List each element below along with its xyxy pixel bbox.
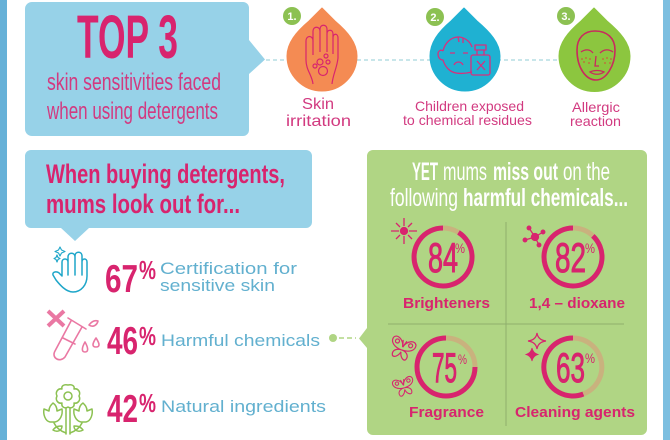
label: certification: sensitive skin bbox=[160, 276, 275, 295]
connector: chemicals to panel bbox=[329, 334, 356, 342]
connector line: top row bbox=[266, 59, 592, 61]
item 2: children exposed bbox=[403, 8, 532, 128]
label: skin irritation: Skin bbox=[302, 96, 334, 113]
chart: brighteners 84% bbox=[391, 218, 490, 312]
heading: yet mums: following bbox=[390, 184, 458, 212]
heading: when buying bbox=[46, 159, 285, 219]
item 3: allergic reaction bbox=[557, 7, 630, 129]
left border bbox=[0, 0, 7, 440]
label: allergic reaction: reaction bbox=[570, 113, 621, 129]
label: children exposed bbox=[403, 98, 532, 128]
chart: cleaning agents 63% bbox=[515, 333, 635, 421]
chart: fragrance 75% bbox=[387, 335, 484, 421]
chart: brighteners 84%: 84 bbox=[428, 234, 458, 281]
label: brighteners: Brighteners bbox=[403, 296, 490, 312]
icon: green drop with face bbox=[559, 8, 630, 92]
value: 46%: % bbox=[139, 321, 156, 351]
label: fragrance: Fragrance bbox=[409, 405, 484, 421]
subheading: when using detergents bbox=[46, 98, 218, 125]
label: children exposed: to chemical residues bbox=[403, 112, 532, 128]
heading: top 3: TOP 3 bbox=[77, 3, 178, 71]
value: 46%: 46 bbox=[107, 320, 138, 363]
heading: yet mums: miss out bbox=[493, 158, 558, 186]
value: 42%: 42 bbox=[107, 388, 138, 431]
label: certification bbox=[160, 259, 297, 295]
badge: 2: 2. bbox=[430, 12, 440, 24]
badge: 1: 1. bbox=[287, 11, 297, 23]
heading: when buying: When buying detergents, bbox=[46, 159, 285, 189]
value: 67%: % bbox=[139, 255, 156, 285]
icon: clean hand bbox=[53, 247, 87, 292]
icon: sparkles bbox=[526, 333, 546, 361]
icon: flowers bbox=[44, 385, 92, 434]
chart: dioxane 82%: 82 bbox=[555, 234, 586, 281]
label: skin irritation bbox=[286, 96, 351, 130]
chart: fragrance 75%: 75 bbox=[432, 344, 457, 391]
item 1: skin irritation bbox=[283, 7, 357, 130]
right border bbox=[663, 0, 670, 440]
icon: butterflies bbox=[387, 335, 417, 398]
label: dioxane: 1,4 – dioxane bbox=[529, 296, 625, 312]
value: 42%: % bbox=[139, 388, 156, 418]
chart: dioxane 82% bbox=[523, 226, 625, 312]
label: cleaning agents: Cleaning agents bbox=[515, 405, 635, 421]
heading: yet mums: YET bbox=[412, 158, 438, 186]
chart: fragrance 75%: % bbox=[458, 351, 467, 367]
icon: test tube bbox=[48, 311, 99, 360]
label: children exposed: Children exposed bbox=[415, 98, 524, 114]
label: allergic reaction: Allergic bbox=[572, 99, 620, 115]
heading: yet mums: mums bbox=[443, 158, 487, 186]
icon: orange drop with hand bbox=[287, 8, 357, 91]
panel: top 3 bbox=[25, 2, 265, 136]
icon: molecule bbox=[523, 226, 545, 247]
stat: harmful chemicals bbox=[48, 311, 320, 363]
label: allergic reaction bbox=[570, 99, 621, 129]
panel: harmful chemicals bbox=[359, 150, 647, 435]
subheading: skin sensitivities faced bbox=[47, 69, 221, 96]
label: certification: Certification for bbox=[160, 259, 297, 278]
badge: 3: 3. bbox=[561, 11, 571, 23]
label: skin irritation: irritation bbox=[286, 113, 351, 130]
icon: blue drop with child and bottle bbox=[430, 8, 500, 91]
subheading bbox=[46, 69, 221, 125]
panel: when buying bbox=[25, 150, 312, 241]
value: 67%: 67 bbox=[105, 258, 138, 301]
label: natural ingredients: Natural ingredients bbox=[161, 397, 326, 416]
label: harmful chemicals: Harmful chemicals bbox=[161, 331, 320, 350]
chart: brighteners 84%: % bbox=[455, 240, 465, 256]
icon: sun bbox=[391, 218, 417, 244]
stat: natural ingredients bbox=[44, 385, 326, 434]
chart: cleaning agents 63%: % bbox=[585, 350, 595, 366]
stat: certification bbox=[53, 247, 297, 301]
chart: dioxane 82%: % bbox=[585, 240, 595, 256]
heading: when buying: mums look out for... bbox=[46, 189, 240, 219]
heading: yet mums bbox=[390, 158, 628, 212]
heading: yet mums: on the bbox=[563, 158, 610, 186]
chart: cleaning agents 63%: 63 bbox=[556, 344, 585, 391]
